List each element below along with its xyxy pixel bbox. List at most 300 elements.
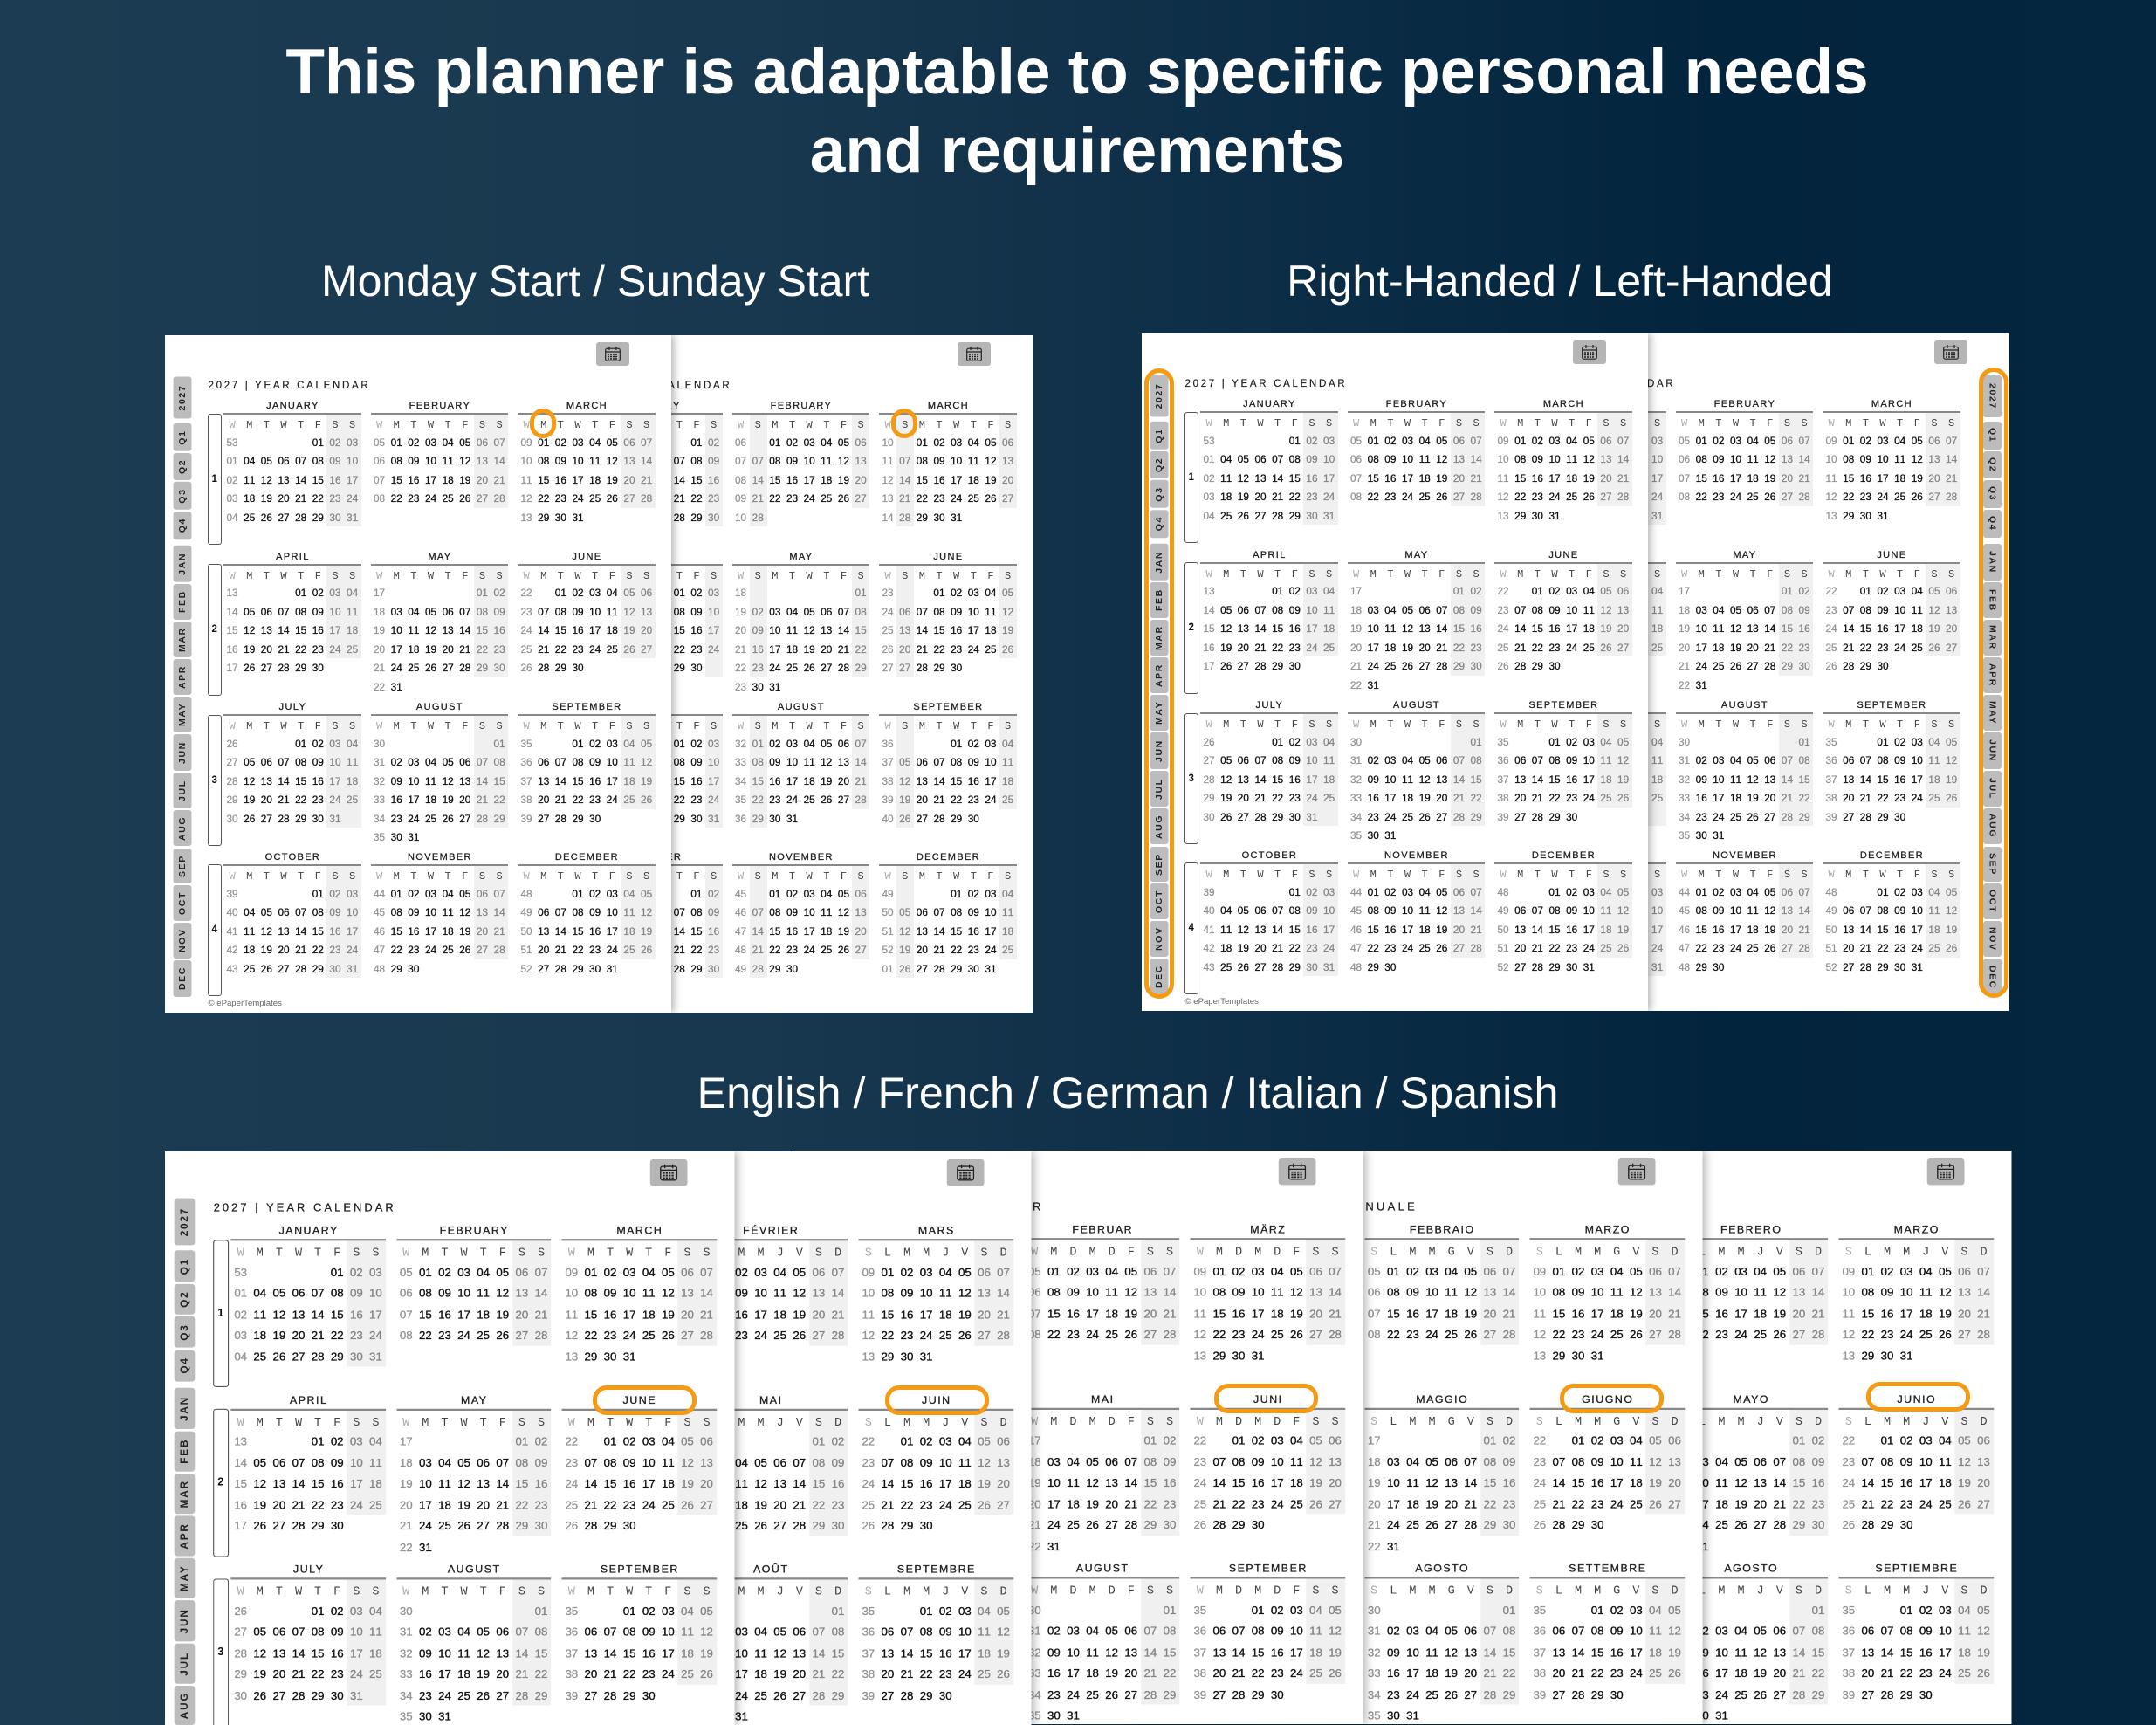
month: September: 35 01 02 03 04 05 36 06 07 08 09 10 11 12 37 13 14 15 16 17 18 19 38 20 21 22 23 24 25 26 39 27 28 29 30 [1826, 735, 1957, 823]
side tabs: 2027 [178, 1207, 190, 1236]
month: August [1348, 697, 1485, 841]
page heading: 2027 | YEAR CALENDAR [208, 381, 370, 391]
month: November: NOVEMBER [1713, 850, 1777, 861]
month: mayo [1673, 1390, 1828, 1552]
side tabs: AUG [177, 815, 188, 841]
month: Mai: W M D M D F S S [1031, 1414, 1172, 1428]
quarter bar 2: 2 [212, 624, 217, 635]
month: April: W M T W T F S S [237, 1415, 378, 1429]
month: juin: JUIN [922, 1394, 951, 1406]
month: May: 17 01 02 18 03 04 05 06 07 08 09 19 10 11 12 13 14 15 16 20 17 18 19 20 21 22 23 21 24 25 26 27 28 29 30 22 31 [400, 1434, 547, 1554]
month: September: W M T W T F S S [1828, 718, 1954, 731]
month: April: 13 01 02 03 04 14 05 06 07 08 09 10 11 15 12 13 14 15 16 17 18 16 19 20 21 22 23 24 25 17 26 27 28 29 30 [1531, 585, 1663, 672]
month: mai: MAI [759, 1394, 783, 1406]
month: February: FEBRUARY [1714, 399, 1775, 409]
month: febbraio: S L M M G V S D [1370, 1245, 1512, 1259]
month: marzo: S L M M J V S D [1844, 1245, 1987, 1259]
month: marzo: MARZO [1893, 1224, 1940, 1236]
month: June: JUNE [933, 552, 963, 562]
month: August: W M D M D F S S [1031, 1584, 1172, 1598]
month: April: APRIL [1253, 550, 1287, 560]
month: septiembre: 35 01 02 03 04 05 36 06 07 08 09 10 11 12 37 13 14 15 16 17 18 19 38 20 21 22 23 24 25 26 39 27 28 29 30 [1842, 1603, 1990, 1701]
month: July: JULY [1584, 700, 1611, 711]
side tabs on the right: NOV [1987, 927, 1997, 951]
month: October: OCTOBER [627, 852, 682, 862]
month: août: 30 01 31 02 03 04 05 06 07 08 32 09 10 11 12 13 14 15 33 16 17 18 19 20 21 22 34 23 24 25 26 27 28 29 35 30 31 [697, 1604, 845, 1723]
month: September [561, 1560, 716, 1722]
side tabs: MAY [1154, 701, 1164, 725]
month: November [1348, 847, 1485, 991]
quarter bar 4 [1184, 862, 1198, 993]
month: January: JANUARY [628, 401, 681, 411]
month: November: W M T W T F S S [1353, 869, 1479, 881]
month: Februar: FEBRUAR [1072, 1224, 1133, 1236]
title [285, 37, 1869, 186]
month: febrero: 05 01 02 03 04 05 06 07 06 08 09 10 11 12 13 14 07 15 16 17 18 19 20 21 08 22 23 24 25 26 27 28 [1677, 1264, 1824, 1342]
side tabs on the right: JAN [1987, 551, 1997, 574]
month: August: W M T W T F S S [402, 1584, 544, 1598]
month: settembre [1529, 1559, 1684, 1722]
month: January: W M T W T F S S [1534, 417, 1660, 430]
month: October: 39 01 02 03 40 04 05 06 07 08 09 10 41 11 12 13 14 15 16 17 42 18 19 20 21 22 23 24 43 25 26 27 28 29 30 31 [227, 887, 358, 975]
month: February: W M T W T F S S [402, 1246, 544, 1260]
month: junio: 22 01 02 03 04 05 06 23 07 08 09 10 11 12 13 24 14 15 16 17 18 19 20 25 21 22 23 24 25 26 27 26 28 29 30 [1842, 1433, 1990, 1532]
month: August [1676, 697, 1813, 841]
month: January [223, 397, 361, 541]
month: September [1494, 697, 1632, 841]
month: December [518, 849, 655, 993]
quarter bar 3: 3 [1189, 773, 1194, 784]
month: August: AUGUST [1076, 1563, 1129, 1575]
month: December: 49 01 02 03 04 50 05 06 07 08 09 10 11 51 12 13 14 15 16 17 18 52 19 20 21 22 23 24 25 01 26 27 28 29 30 31 [882, 887, 1013, 975]
month: May: MAY [428, 552, 451, 562]
month: Mai [1025, 1390, 1179, 1552]
icon: calendar button [649, 1159, 687, 1186]
icon: calendar button [596, 342, 628, 366]
month: May: MAY [789, 552, 813, 562]
month: July [230, 1560, 385, 1722]
quarter bar 2 [1184, 562, 1198, 693]
side tabs on the right: DEC [1987, 966, 1997, 988]
month: July [1200, 697, 1337, 841]
month: September: 35 01 02 03 04 05 36 06 07 08 09 10 11 12 37 13 14 15 16 17 18 19 38 20 21 22 23 24 25 26 39 27 28 29 30 [565, 1604, 713, 1702]
month: agosto [1673, 1559, 1828, 1722]
month: août: S L M M J V S D [700, 1584, 841, 1598]
month: March [518, 397, 655, 541]
month: March: MARCH [928, 401, 969, 411]
highlight: JUNI [1214, 1384, 1318, 1413]
month: mai: 17 01 02 18 03 04 05 06 07 08 09 19 10 11 12 13 14 15 16 20 17 18 19 20 21 22 23 21 24 25 26 27 28 29 30 22 31 [697, 1434, 845, 1554]
month: September: SEPTEMBER [1528, 700, 1598, 711]
month: Mai: 17 01 02 18 03 04 05 06 07 08 09 19 10 11 12 13 14 15 16 20 17 18 19 20 21 22 23 21 24 25 26 27 28 29 30 22 31 [1028, 1433, 1176, 1553]
side tabs on the right: Q4 [1987, 516, 1997, 531]
side tabs: Q4 [1154, 516, 1164, 531]
month: July: W M T W T F S S [229, 720, 355, 732]
month: October: OCTOBER [1570, 850, 1625, 861]
month: September: SEPTEMBER [1229, 1563, 1308, 1575]
side tabs: JUN [178, 1608, 190, 1633]
month: April: 13 01 02 03 04 14 05 06 07 08 09 10 11 15 12 13 14 15 16 17 18 16 19 20 21 22 23 24 25 17 26 27 28 29 30 [227, 587, 358, 674]
quarter bar 1 [208, 414, 222, 545]
month: August: W M T W T F S S [1353, 718, 1479, 731]
month: April [585, 548, 723, 691]
side tabs: SEP [177, 855, 188, 877]
month: September: SEPTEMBER [1857, 700, 1926, 711]
month: June: W M T W T F S S [567, 1415, 710, 1429]
month: February [396, 1221, 551, 1383]
page: French calendar [462, 1151, 1032, 1725]
side tabs: JUN [1154, 739, 1164, 762]
month: April: APRIL [290, 1394, 327, 1406]
side tabs: Q1 [1154, 428, 1164, 443]
footer credit: © ePaperTemplates [1185, 997, 1259, 1007]
month: May [1348, 546, 1485, 690]
month: June: W M T W T F S S [523, 569, 649, 581]
month: July [1528, 697, 1665, 841]
month: September: W M D M D F S S [1197, 1584, 1338, 1598]
month: July: 26 01 02 03 04 27 05 06 07 08 09 10 11 28 12 13 14 15 16 17 18 29 19 20 21 22 23 24 25 30 26 27 28 29 30 31 [1203, 735, 1335, 823]
month: October: 39 01 02 03 40 04 05 06 07 08 09 10 41 11 12 13 14 15 16 17 42 18 19 20 21 22 23 24 43 25 26 27 28 29 30 31 [1203, 885, 1335, 973]
quarter bar 3 [1184, 712, 1198, 844]
month: March: 09 01 02 03 04 05 06 07 10 08 09 10 11 12 13 14 11 15 16 17 18 19 20 21 12 22 23 24 25 26 27 28 13 29 30 31 [520, 436, 652, 524]
month: June: 22 01 02 03 04 05 06 23 07 08 09 10 11 12 13 24 14 15 16 17 18 19 20 25 21 22 23 24 25 26 27 26 28 29 30 [520, 587, 652, 674]
month: September [1823, 697, 1960, 841]
month: août [693, 1560, 848, 1722]
month: February: W M T W T F S S [1681, 417, 1807, 430]
month: maggio [1364, 1390, 1519, 1552]
month: marzo: MARZO [1584, 1224, 1631, 1236]
page: right-handed calendar [1142, 333, 1648, 1011]
month: February: W S M T W T F S [738, 419, 863, 431]
month: September: 35 01 02 03 04 05 36 06 07 08 09 10 11 12 37 13 14 15 16 17 18 19 38 20 21 22 23 24 25 26 39 27 28 29 30 [520, 737, 652, 825]
month: junio [1838, 1390, 1993, 1552]
icon: calendar button [958, 342, 990, 366]
month: June [518, 548, 655, 691]
month: October: W S M T W T F S [590, 870, 717, 883]
month: November: 44 01 02 03 04 05 06 07 45 08 09 10 11 12 13 14 46 15 16 17 18 19 20 21 47 22 23 24 25 26 27 28 48 29 30 [1350, 885, 1482, 973]
side tabs [175, 1198, 196, 1725]
month: February: 05 01 02 03 04 05 06 07 06 08 09 10 11 12 13 14 07 15 16 17 18 19 20 21 08 22 23 24 25 26 27 28 [1679, 435, 1810, 503]
month: Juni: 22 01 02 03 04 05 06 23 07 08 09 10 11 12 13 24 14 15 16 17 18 19 20 25 21 22 23 24 25 26 27 26 28 29 30 [1193, 1433, 1342, 1532]
month: May: W M T W T F S S [1681, 567, 1807, 580]
month: April: APRIL [637, 552, 671, 562]
side tabs: Q1 [178, 1258, 190, 1275]
month: März [1191, 1220, 1345, 1383]
month: marzo: 09 01 02 03 04 05 06 07 10 08 09 10 11 12 13 14 11 15 16 17 18 19 20 21 12 22 23 24 25 26 27 28 13 29 30 31 [1533, 1264, 1681, 1363]
month: September: SEPTEMBER [552, 702, 621, 712]
month: maggio: MAGGIO [1416, 1393, 1468, 1405]
footer credit: © ePaperTemplates [208, 999, 282, 1008]
month: May [731, 548, 869, 691]
month: October [1200, 847, 1337, 991]
quarter bar 3: 3 [217, 1646, 223, 1658]
month: April [1528, 546, 1665, 690]
month: May: W S M T W T F S [738, 569, 863, 581]
side tabs on the right: OCT [1987, 890, 1997, 913]
month: November: W M T W T F S S [1681, 869, 1807, 881]
month: May: 17 01 02 18 03 04 05 06 07 08 09 19 10 11 12 13 14 15 16 20 17 18 19 20 21 22 23 21 24 25 26 27 28 29 30 22 31 [1679, 585, 1810, 691]
side tabs: Q2 [1154, 457, 1164, 472]
month: December: W M T W T F S S [523, 870, 649, 883]
month: junio: S L M M J V S D [1844, 1414, 1987, 1428]
month: September [879, 698, 1016, 842]
month: maggio: 17 01 02 18 03 04 05 06 07 08 09 19 10 11 12 13 14 15 16 20 17 18 19 20 21 22 23 21 24 25 26 27 28 29 30 22 31 [1367, 1433, 1515, 1553]
month: May: MAY [1733, 550, 1756, 560]
month: mars: 09 01 02 03 04 05 06 07 10 08 09 10 11 12 13 14 11 15 16 17 18 19 20 21 12 22 23 24 25 26 27 28 13 29 30 31 [862, 1265, 1010, 1364]
month: August: 32 01 02 03 04 05 06 07 33 08 09 10 11 12 13 14 34 15 16 17 18 19 20 21 35 22 23 24 25 26 27 28 36 29 30 31 [735, 737, 867, 825]
side tabs: APR [178, 1522, 190, 1550]
highlight: Sunday column [891, 409, 917, 438]
side tabs: JUL [178, 1652, 190, 1676]
month: April: W M T W T F S S [1534, 567, 1660, 580]
side tabs: DEC [1154, 966, 1164, 988]
month: January [1200, 395, 1337, 539]
month: January: 53 01 02 03 01 04 05 06 07 08 09 10 02 11 12 13 14 15 16 17 03 18 19 20 21 22 23 24 04 25 26 27 28 29 30 31 [234, 1265, 381, 1364]
month: January: 53 01 02 03 01 04 05 06 07 08 09 10 02 11 12 13 14 15 16 17 03 18 19 20 21 22 23 24 04 25 26 27 28 29 30 31 [227, 436, 358, 524]
month: January: JANUARY [1571, 399, 1624, 409]
month: febbraio [1364, 1220, 1519, 1383]
month: January [585, 397, 723, 541]
highlight: JUNE [593, 1385, 697, 1415]
side tabs on the right: Q1 [1987, 428, 1997, 443]
month: August: 30 01 31 02 03 04 05 06 07 08 32 09 10 11 12 13 14 15 33 16 17 18 19 20 21 22 34 23 24 25 26 27 28 29 35 30 31 [1350, 735, 1482, 842]
month: September: 35 01 02 03 04 05 36 06 07 08 09 10 11 12 37 13 14 15 16 17 18 19 38 20 21 22 23 24 25 26 39 27 28 29 30 [1193, 1603, 1342, 1701]
month: July: JULY [293, 1564, 324, 1576]
side tabs on the right [1983, 375, 2002, 995]
month: March: W M T W T F S S [1828, 417, 1954, 430]
month: March: W M T W T F S S [523, 419, 649, 431]
month: January: JANUARY [266, 401, 319, 411]
month: August: 30 01 31 02 03 04 05 06 07 08 32 09 10 11 12 13 14 15 33 16 17 18 19 20 21 22 34 23 24 25 26 27 28 29 35 30 31 [1028, 1603, 1176, 1722]
title: and requirements [810, 115, 1344, 186]
month: August [370, 698, 508, 842]
quarter bar 2 [213, 1409, 228, 1557]
page: Italian calendar [1133, 1151, 1702, 1724]
month: Mai: MAI [1091, 1393, 1115, 1405]
month: May: 17 01 02 18 03 04 05 06 07 08 09 19 10 11 12 13 14 15 16 20 17 18 19 20 21 22 23 21 24 25 26 27 28 29 30 22 31 [374, 587, 505, 693]
month: July: JULY [641, 702, 668, 712]
page heading: 2027 | YEAR CALENDAR [1514, 379, 1675, 389]
month: March: 09 01 02 03 04 05 06 07 10 08 09 10 11 12 13 14 11 15 16 17 18 19 20 21 12 22 23 24 25 26 27 28 13 29 30 31 [565, 1265, 713, 1364]
month: July: W S M T W T F S [590, 720, 717, 732]
page: German calendar [793, 1151, 1363, 1724]
month: July: 26 01 02 03 04 27 05 06 07 08 09 10 11 28 12 13 14 15 16 17 18 29 19 20 21 22 23 24 25 30 26 27 28 29 30 31 [1531, 735, 1663, 823]
month: August [1025, 1559, 1179, 1722]
side tabs: Q2 [178, 1291, 190, 1308]
side tabs: FEB [1154, 589, 1164, 611]
month: février: S L M M J V S D [700, 1246, 841, 1260]
panel: right and left handed calendars [1142, 333, 2009, 1011]
month: December: 48 01 02 03 04 05 49 06 07 08 09 10 11 12 50 13 14 15 16 17 18 19 51 20 21 22 23 24 25 26 52 27 28 29 30 31 [1498, 885, 1629, 973]
month: November [1676, 847, 1813, 991]
month: April [223, 548, 361, 691]
side tabs: AUG [1154, 814, 1164, 839]
side tabs: SEP [1154, 853, 1164, 876]
month: June: 22 01 02 03 04 05 06 23 07 08 09 10 11 12 13 24 14 15 16 17 18 19 20 25 21 22 23 24 25 26 27 26 28 29 30 [1826, 585, 1957, 672]
month: marzo: S L M M G V S D [1535, 1245, 1677, 1259]
month: März: W M D M D F S S [1197, 1245, 1338, 1259]
month: November: NOVEMBER [408, 852, 472, 862]
side tabs: Q1 [177, 430, 188, 444]
month: June: W M T W T F S S [1828, 567, 1954, 580]
month: December [879, 849, 1016, 993]
month: May: W M T W T F S S [1353, 567, 1479, 580]
month: December: W M T W T F S S [1500, 869, 1626, 881]
month: August: AUGUST [1721, 700, 1768, 711]
side tabs on the right: 2027 [1987, 383, 1997, 409]
month: May [370, 548, 508, 691]
page heading: 2027 | CALENDARIO ANNUALE [1181, 1201, 1418, 1213]
month: January: W M T W T F S S [229, 419, 355, 431]
month: May: 17 01 02 18 03 04 05 06 07 08 09 19 10 11 12 13 14 15 16 20 17 18 19 20 21 22 23 21 24 25 26 27 28 29 30 22 31 [1350, 585, 1482, 691]
month: November: NOVEMBER [769, 852, 834, 862]
month: March: W M T W T F S S [1500, 417, 1626, 430]
icon: calendar button [1617, 1158, 1655, 1185]
side tabs: NOV [1154, 927, 1164, 951]
month: August: 30 01 31 02 03 04 05 06 07 08 32 09 10 11 12 13 14 15 33 16 17 18 19 20 21 22 34 23 24 25 26 27 28 29 35 30 31 [1679, 735, 1810, 842]
month: September [1191, 1559, 1345, 1722]
month: October: OCTOBER [1242, 850, 1297, 861]
month: September: W M T W T F S S [1500, 718, 1626, 731]
month: June [1494, 546, 1632, 690]
side tabs: Q3 [177, 488, 188, 503]
month: Februar: W M D M D F S S [1031, 1245, 1172, 1259]
month: febrero [1673, 1220, 1828, 1383]
month: February: FEBRUARY [1386, 399, 1447, 409]
quarter bar 3 [213, 1578, 228, 1724]
month: August: AUGUST [1393, 700, 1440, 711]
side tabs: FEB [178, 1439, 190, 1464]
side tabs: JUN [177, 741, 188, 764]
quarter bar 4: 4 [1189, 923, 1194, 933]
month: February [370, 397, 508, 541]
month: June: JUNE [622, 1394, 656, 1406]
month: July: W M T W T F S S [237, 1584, 378, 1598]
month: September: 35 01 02 03 04 05 36 06 07 08 09 10 11 12 37 13 14 15 16 17 18 19 38 20 21 22 23 24 25 26 39 27 28 29 30 [1498, 735, 1629, 823]
month: December: W M T W T F S S [1828, 869, 1954, 881]
month: October [1528, 847, 1665, 991]
highlight: left side tabs [1144, 368, 1174, 999]
month: March: W S M T W T F S [884, 419, 1011, 431]
month: June: 22 01 02 03 04 05 06 23 07 08 09 10 11 12 13 24 14 15 16 17 18 19 20 25 21 22 23 24 25 26 27 26 28 29 30 [565, 1434, 713, 1533]
month: August: AUGUST [778, 702, 825, 712]
month: January: W M T W T F S S [1205, 417, 1332, 430]
side tabs on the right: AUG [1987, 814, 1997, 839]
month: June [561, 1391, 716, 1553]
month: mars [859, 1221, 1013, 1383]
side tabs: APR [1154, 663, 1164, 687]
side tabs: OCT [177, 891, 188, 915]
month: August: W M T W T F S S [376, 720, 502, 732]
month: March: 09 01 02 03 04 05 06 07 10 08 09 10 11 12 13 14 11 15 16 17 18 19 20 21 12 22 23 24 25 26 27 28 13 29 30 31 [1826, 435, 1957, 522]
month: febbraio: 05 01 02 03 04 05 06 07 06 08 09 10 11 12 13 14 07 15 16 17 18 19 20 21 08 22 23 24 25 26 27 28 [1367, 1264, 1515, 1342]
month: février: 05 01 02 03 04 05 06 07 06 08 09 10 11 12 13 14 07 15 16 17 18 19 20 21 08 22 23 24 25 26 27 28 [697, 1265, 845, 1343]
month: agosto: S L M M J V S D [1679, 1584, 1821, 1598]
page heading: 2027 | YEAR CALENDAR [1185, 379, 1347, 389]
month: July: W M T W T F S S [1205, 718, 1332, 731]
month: mai [693, 1391, 848, 1553]
icon: calendar button [1934, 340, 1967, 364]
month: August [731, 698, 869, 842]
panel: five language calendars [165, 1151, 2012, 1725]
month: septiembre: SEPTIEMBRE [1875, 1563, 1958, 1575]
month: February: 06 01 02 03 04 05 06 07 07 08 09 10 11 12 13 08 14 15 16 17 18 19 20 09 21 22 23 24 25 26 27 10 28 [735, 436, 867, 524]
month: March [879, 397, 1016, 541]
month: July: JULY [279, 702, 306, 712]
page: left-handed calendar [1503, 333, 2009, 1011]
side tabs [1150, 375, 1168, 994]
month: October: W M T W T F S S [1534, 869, 1660, 881]
month: June: JUNE [1548, 550, 1578, 560]
page: Spanish calendar [1442, 1151, 2011, 1724]
month: September: SEPTEMBER [601, 1564, 679, 1576]
month: marzo [1529, 1220, 1684, 1383]
month: July: JULY [1256, 700, 1283, 711]
month: septembre: S L M M J V S D [865, 1584, 1006, 1598]
month: settembre: SETTEMBRE [1569, 1563, 1646, 1575]
month: Juni [1191, 1390, 1345, 1552]
month: March: 10 01 02 03 04 05 06 11 07 08 09 10 11 12 13 12 14 15 16 17 18 19 20 13 21 22 23 24 25 26 27 14 28 29 30 31 [882, 436, 1013, 524]
side tabs: JAN [1154, 551, 1164, 574]
month: January [1528, 395, 1665, 539]
month: December: DECEMBER [1532, 850, 1596, 861]
month: giugno: GIUGNO [1582, 1393, 1633, 1405]
month: December: DECEMBER [555, 852, 619, 862]
month: September: W M T W T F S S [523, 720, 649, 732]
month: April: APRIL [1581, 550, 1615, 560]
calendar content shifted left [1514, 379, 1960, 976]
side tabs: 2027 [177, 385, 188, 411]
page heading: 2027 | YEAR CALENDAR [213, 1203, 396, 1214]
month: April: 13 01 02 03 04 14 05 06 07 08 09 10 11 15 12 13 14 15 16 17 18 16 19 20 21 22 23 24 25 17 26 27 28 29 30 [234, 1434, 381, 1533]
month: November: 44 01 02 03 04 05 06 07 45 08 09 10 11 12 13 14 46 15 16 17 18 19 20 21 47 22 23 24 25 26 27 28 48 29 30 [374, 887, 505, 975]
side tabs: APR [177, 665, 188, 689]
month: December [1494, 847, 1632, 991]
month: February [1348, 395, 1485, 539]
month: December [1823, 847, 1960, 991]
month: juin [859, 1391, 1013, 1553]
icon: calendar button [947, 1159, 984, 1186]
month: agosto [1364, 1559, 1519, 1722]
month: März: MÄRZ [1250, 1224, 1286, 1236]
month: June: W S M T W T F S [884, 569, 1011, 581]
month: February: FEBRUARY [439, 1225, 509, 1237]
side tabs on the right: FEB [1987, 589, 1997, 611]
month: February: FEBRUARY [771, 401, 832, 411]
month: June: JUNE [572, 552, 601, 562]
month: septembre [859, 1560, 1013, 1722]
month: October: 39 01 02 03 40 04 05 06 07 08 09 10 41 11 12 13 14 15 16 17 42 18 19 20 21 22 23 24 43 25 26 27 28 29 30 31 [1531, 885, 1663, 973]
month: February: 05 01 02 03 04 05 06 07 06 08 09 10 11 12 13 14 07 15 16 17 18 19 20 21 08 22 23 24 25 26 27 28 [374, 436, 505, 505]
month: May: W M T W T F S S [376, 569, 502, 581]
month: février: FÉVRIER [744, 1225, 800, 1237]
quarter bar 2: 2 [1189, 622, 1194, 633]
quarter bar 1: 1 [217, 1307, 223, 1319]
month: January: JANUARY [278, 1225, 338, 1237]
month: février [693, 1221, 848, 1383]
side tabs: FEB [177, 591, 188, 613]
side tabs on the right: JUN [1987, 739, 1997, 762]
side tabs: OCT [1154, 890, 1164, 913]
side tabs: MAR [177, 627, 188, 652]
month: mai: S L M M J V S D [700, 1415, 841, 1429]
side tabs on the right: JUL [1987, 778, 1997, 800]
month: August: 30 01 31 02 03 04 05 06 07 08 32 09 10 11 12 13 14 15 33 16 17 18 19 20 21 22 34 23 24 25 26 27 28 29 35 30 31 [374, 737, 505, 843]
side tabs: Q3 [1154, 486, 1164, 501]
month: July: 27 01 02 03 28 04 05 06 07 08 09 10 29 11 12 13 14 15 16 17 30 18 19 20 21 22 23 24 31 25 26 27 28 29 30 31 [588, 737, 719, 825]
month: October: 40 01 02 41 03 04 05 06 07 08 09 42 10 11 12 13 14 15 16 43 17 18 19 20 21 22 23 44 24 25 26 27 28 29 30 45 31 [588, 887, 719, 993]
quarter bar 2: 2 [217, 1476, 223, 1488]
